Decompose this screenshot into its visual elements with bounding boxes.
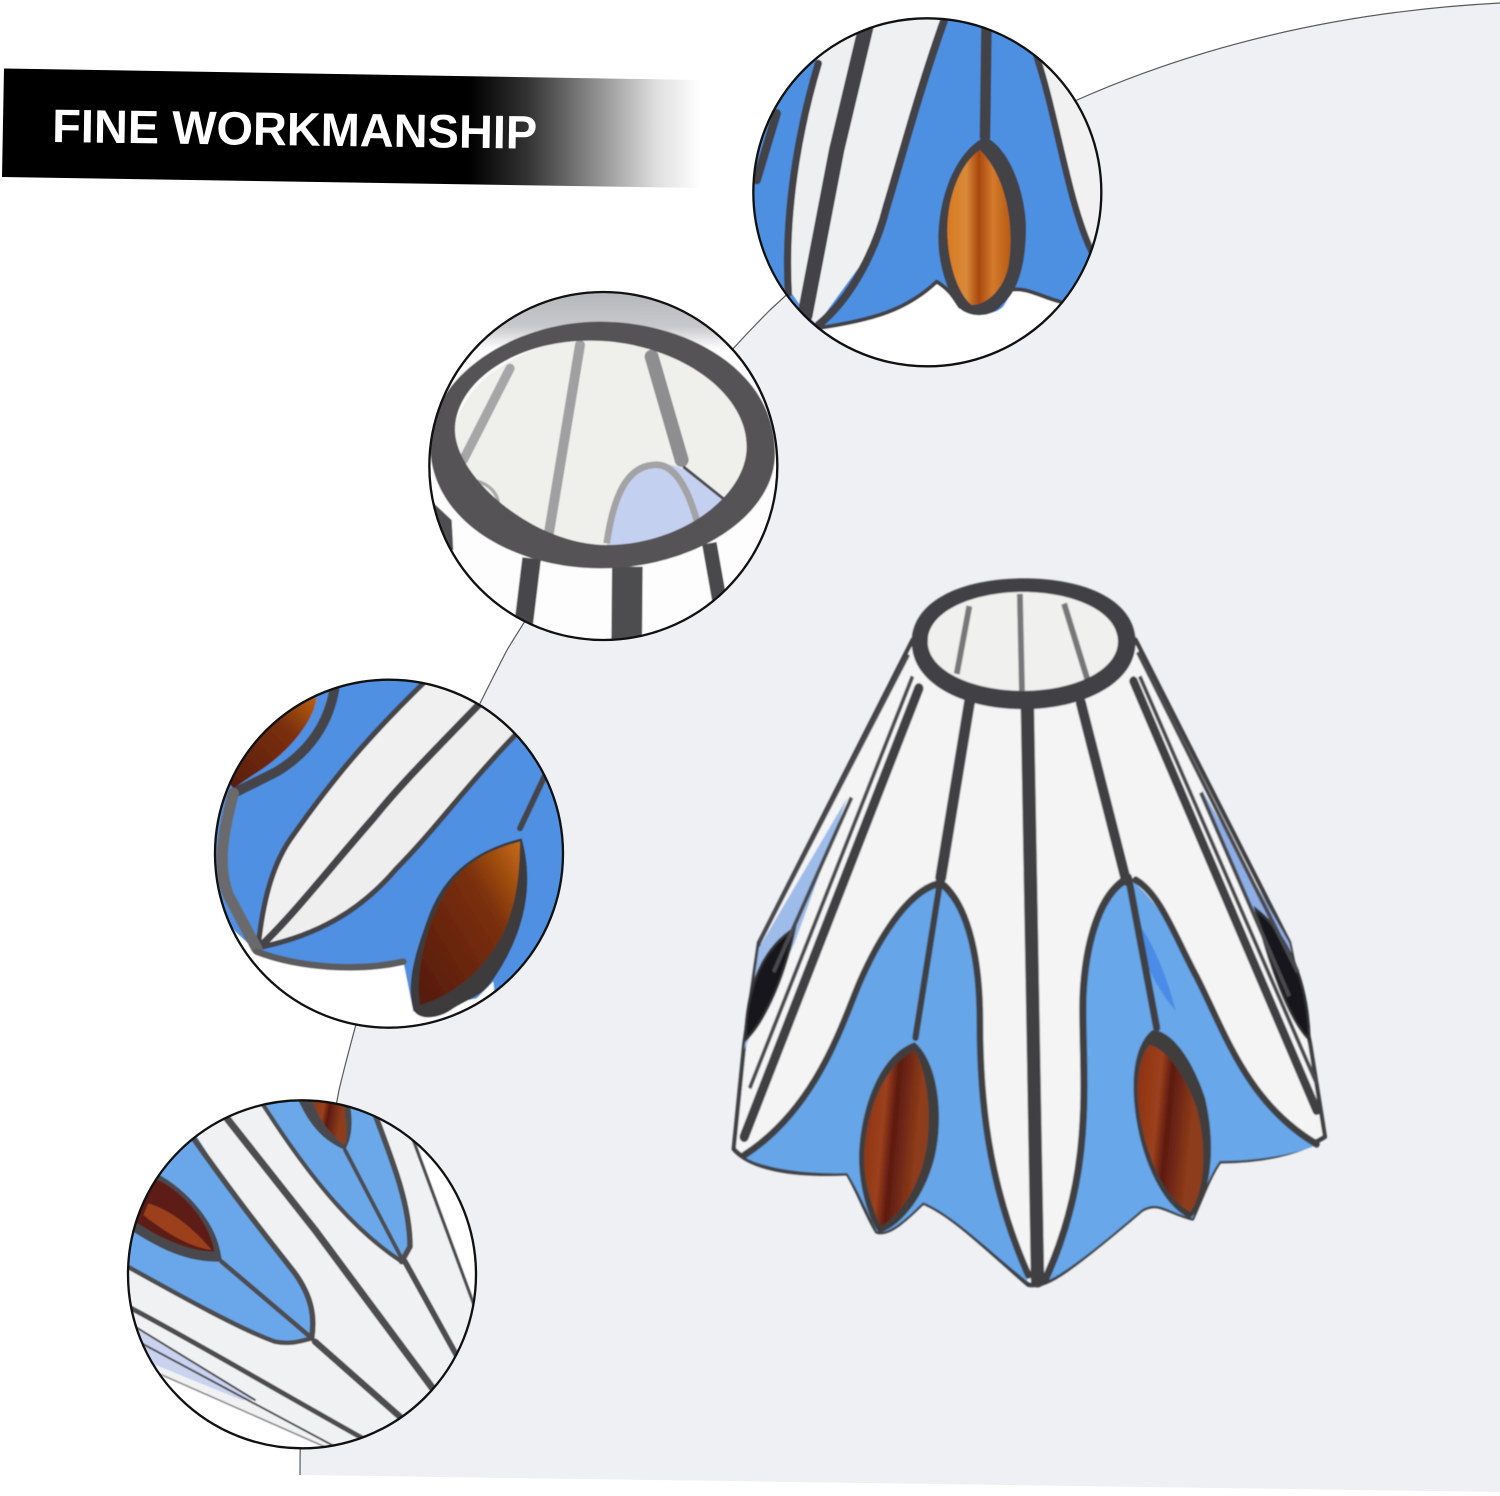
detail circle: radiating lines close-up bbox=[126, 1099, 478, 1450]
lead lines bbox=[222, 680, 548, 967]
left blue flower bbox=[744, 885, 1028, 1282]
detail circle: diagonal petals close-up bbox=[214, 678, 564, 1029]
top amber bead bbox=[297, 1097, 352, 1150]
blue glass bbox=[216, 680, 562, 1012]
left side panel bbox=[744, 655, 913, 1088]
outer white corner bbox=[417, 1146, 475, 1298]
inner lines bbox=[463, 345, 682, 537]
lead came lines bbox=[744, 681, 1317, 1280]
blue glass bbox=[754, 20, 1090, 326]
lead lines bbox=[757, 13, 1092, 328]
right amber bead bbox=[1134, 1030, 1211, 1218]
blue petal left bbox=[115, 1133, 313, 1342]
lower panels bbox=[434, 503, 454, 550]
blue petal top bbox=[262, 1097, 410, 1262]
circle outline bbox=[215, 680, 563, 1028]
white glass strips bbox=[1041, 62, 1100, 246]
right blue flower bbox=[1045, 877, 1319, 1281]
detail circle: amber bead close-up bbox=[752, 17, 1102, 368]
circle outline bbox=[128, 1100, 476, 1448]
white glass strips bbox=[260, 684, 476, 940]
lamp body bbox=[734, 640, 1325, 1285]
banner: fine workmanship bbox=[2, 68, 700, 188]
title: FINE WORKMANSHIP bbox=[52, 99, 538, 159]
lower-right amber bead bbox=[411, 838, 527, 1017]
background panel bbox=[300, 3, 1500, 1492]
inner arch bbox=[607, 464, 725, 547]
side lavender glass bbox=[135, 1328, 255, 1400]
left amber bead bbox=[859, 1042, 939, 1233]
circle outline bbox=[753, 18, 1101, 366]
rim ring bbox=[430, 322, 775, 568]
top-left amber bead bbox=[230, 697, 318, 788]
circle outline bbox=[429, 292, 777, 640]
amber bead bbox=[938, 137, 1026, 315]
left amber bead bbox=[134, 1175, 222, 1262]
lamp top rim bbox=[912, 578, 1136, 709]
main product: stained glass lamp shade bbox=[734, 578, 1325, 1285]
lead lines bbox=[122, 1100, 478, 1448]
detail circle: top rim close-up bbox=[420, 290, 790, 657]
right side panel bbox=[1138, 652, 1317, 1083]
inner view bbox=[453, 338, 750, 548]
